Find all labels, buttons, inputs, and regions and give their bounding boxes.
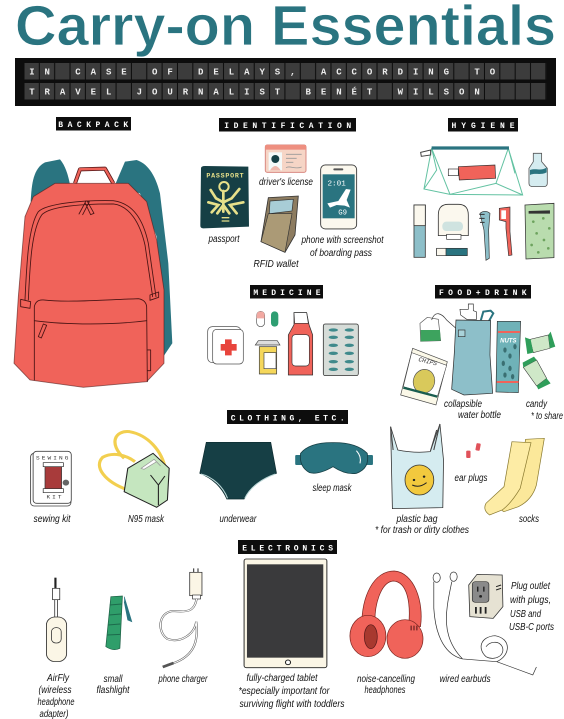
icon: tablet — [244, 559, 327, 668]
icon: candy — [523, 332, 555, 389]
icon: toothpaste — [448, 165, 496, 180]
heading: food and drink — [435, 285, 531, 298]
icon: red syrup bottle — [288, 313, 313, 375]
label: ear plugs: ear plugs — [454, 473, 488, 484]
heading: hygiene: HYGIENE — [452, 122, 519, 131]
icon: underwear — [200, 442, 276, 499]
label: plastic bag: plastic bag — [396, 514, 438, 525]
icon: lotion bottle — [529, 153, 547, 187]
heading: clothing etc — [227, 410, 348, 424]
label: AirFly: AirFly — [46, 673, 70, 684]
label: water bottle: water bottle — [458, 410, 501, 421]
label: fully-charged tablet: fully-charged tablet — [246, 673, 319, 684]
icon: headphones — [350, 571, 423, 658]
icon: sewing kit: SEWING — [36, 455, 69, 462]
icon: sewing kit — [31, 451, 71, 506]
label: N95 mask: N95 mask — [128, 514, 165, 525]
label: plug outlet: Plug outlet — [511, 581, 551, 592]
icon: phone charger — [160, 568, 202, 667]
heading: electronics: ELECTRONICS — [242, 544, 337, 554]
label: phone with screenshot: phone with screenshot — [301, 235, 384, 246]
icon: tissue box — [525, 203, 554, 259]
clothing group — [31, 424, 544, 515]
identification group — [200, 145, 357, 252]
icon: AirFly adapter — [46, 578, 67, 662]
label: candy: candy — [526, 399, 548, 410]
icon: plastic bag with smiley — [391, 424, 444, 509]
icon: sewing kit: KIT — [46, 494, 62, 501]
icon: mascara tube — [414, 205, 425, 257]
icon: toothbrush — [479, 211, 490, 260]
heading: identification — [219, 118, 356, 132]
label: passport: passport — [208, 234, 240, 245]
hygiene group — [414, 148, 554, 260]
icon: chips bag: CHIPS — [418, 356, 438, 368]
label: USB-C ports: USB-C ports — [509, 622, 554, 633]
label: collapsible: collapsible — [444, 399, 482, 410]
icon: plug outlet — [469, 574, 503, 618]
label: with plugs: with plugs, — [510, 595, 551, 606]
heading: backpack: BACKPACK — [58, 121, 133, 130]
heading: medicine — [250, 285, 325, 298]
icon: nuts bar — [496, 321, 521, 393]
icon: phone with boarding pass — [321, 165, 357, 229]
heading: hygiene — [448, 118, 519, 132]
heading: medicine: MEDICINE — [253, 289, 325, 298]
label: for trash note: * for trash or dirty clothes — [375, 525, 469, 536]
label: especially important: *especially important for — [238, 686, 330, 697]
label: headphone: headphone — [38, 697, 75, 708]
icon: chips bag — [401, 348, 447, 405]
label: phone charger: phone charger — [158, 674, 208, 685]
icon: clear toiletry bag — [421, 148, 523, 195]
electronics group — [46, 559, 536, 675]
icon: capsules — [257, 311, 278, 327]
icon: passport: PASSPORT — [206, 172, 244, 180]
subtitle departures board — [15, 58, 556, 106]
label: driver's license: driver's license — [259, 177, 313, 188]
icon: first aid kit — [208, 327, 243, 364]
label: sewing kit: sewing kit — [34, 514, 72, 525]
icon: driver's license — [265, 145, 306, 172]
label: wireless: (wireless — [38, 685, 72, 696]
icon: deodorant — [438, 204, 468, 239]
icon: lip balm — [437, 248, 467, 256]
label: flashlight: flashlight — [96, 685, 131, 696]
icon: phone with boarding pass: G9 — [338, 209, 347, 217]
label: small: small — [104, 674, 123, 685]
illustration: backpack — [14, 159, 172, 387]
label: sleep mask: sleep mask — [312, 483, 352, 494]
icon: passport — [200, 166, 249, 228]
heading: backpack — [56, 117, 133, 130]
label: underwear: underwear — [220, 514, 257, 525]
icon: sleep mask — [295, 443, 373, 474]
icon: RFID wallet — [261, 196, 298, 252]
medicine group — [208, 304, 555, 405]
icon: nuts bar: NUTS — [500, 339, 516, 345]
icon: socks — [485, 438, 544, 515]
icon: wired earbuds — [433, 572, 536, 675]
heading: identification: IDENTIFICATION — [224, 122, 356, 131]
label: RFID wallet: RFID wallet — [254, 259, 300, 270]
heading: food and drink: FOOD+DRINK — [439, 289, 531, 298]
heading: electronics — [238, 540, 337, 554]
icon: phone with boarding pass: 2:01 — [327, 181, 346, 189]
icon: N95 mask — [99, 432, 169, 507]
heading: clothing etc: CLOTHING, ETC. — [231, 414, 348, 424]
icon: pill bottle — [255, 341, 280, 374]
icon: blister pack — [323, 324, 358, 376]
label: surviving flight: surviving flight with toddlers — [240, 699, 344, 710]
label: USB and: USB and — [510, 609, 541, 620]
label: headphones: headphones — [364, 685, 406, 696]
label: socks: socks — [519, 514, 539, 525]
icon: collapsible water bottle — [452, 304, 493, 395]
icon: ear plugs — [466, 443, 481, 458]
icon: floss pick — [499, 207, 512, 256]
icon: green flashlight — [106, 596, 132, 650]
subtitle departures board: TRAVEL JOURNALIST BENÉT WILSON — [29, 86, 490, 98]
icon: tea bag — [420, 314, 462, 341]
label: of boarding pass: of boarding pass — [310, 248, 372, 259]
subtitle departures board: IN CASE OF DELAYS, ACCORDING TO — [29, 68, 505, 78]
label: noise-cancelling: noise-cancelling — [357, 674, 415, 685]
label: wired earbuds: wired earbuds — [440, 674, 490, 685]
